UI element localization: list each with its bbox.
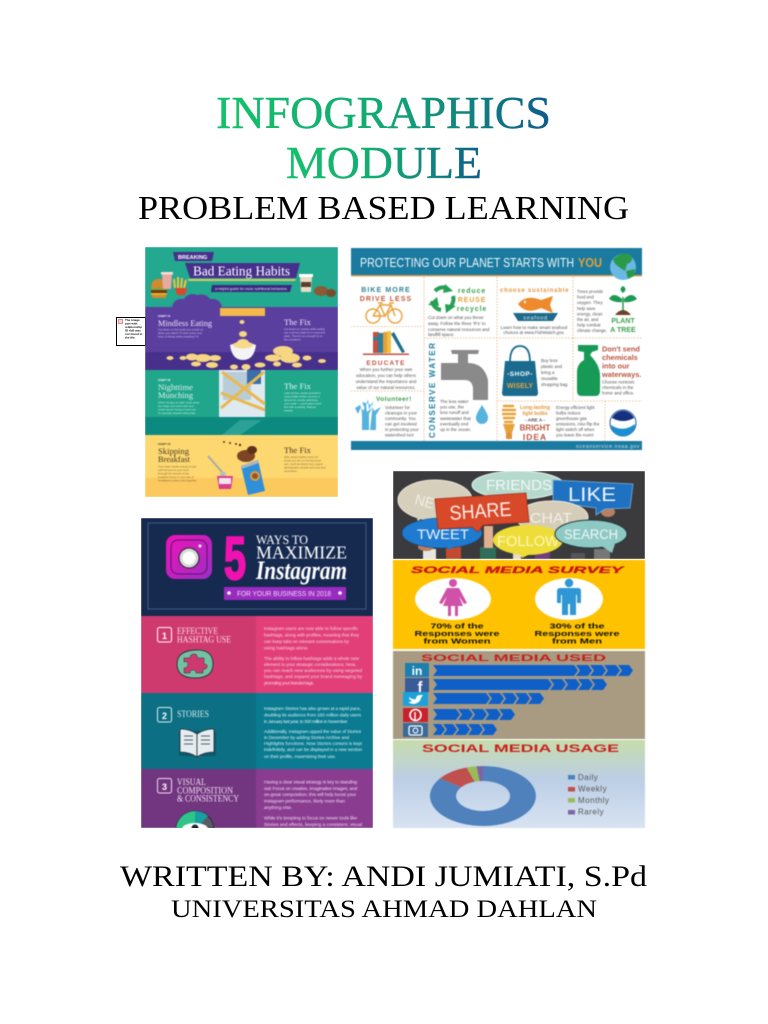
- recycle: REUSE: [458, 297, 486, 304]
- educate: education, you can help others: [356, 373, 417, 378]
- conserve water: [428, 343, 488, 438]
- section: mindless eating: [158, 314, 213, 338]
- no chemicals: Don't send: [602, 344, 640, 354]
- seafood: choose sustainable: [500, 288, 569, 294]
- bar: instagram: [403, 723, 497, 737]
- section: nighttime munching: [158, 378, 200, 415]
- bubble: share: [435, 493, 529, 532]
- fix text: your meal — you'll pass it and: [284, 402, 322, 406]
- section 2: stories: Highlights functions. Now Stories content is kept: [264, 741, 363, 746]
- broken image placeholder: The image: [125, 318, 140, 322]
- bright idea: BRIGHT: [520, 424, 550, 432]
- educate: EDUCATE: [366, 360, 406, 367]
- fix text: plate. There's not enough fit on: [284, 334, 323, 338]
- seafood: seafood: [523, 316, 548, 322]
- volunteer: Volunteer for: [385, 405, 410, 410]
- fix text: decent for mostly satisfying: [284, 398, 318, 402]
- fix text: The Fix: [284, 445, 312, 455]
- header bar: PROTECTING OUR PLANET STARTS WITH: [360, 256, 574, 270]
- plant a tree: oxygen. They: [577, 300, 604, 305]
- university line: UNIVERSITAS AHMAD DAHLAN: [171, 896, 597, 923]
- plant a tree: help combat: [577, 323, 601, 328]
- fix text: can, such as whole fruit, yogurt,: [284, 462, 324, 466]
- shop wisely: -SHOP-: [507, 371, 533, 378]
- fix text: The Fix: [284, 317, 312, 327]
- section: skipping breakfast: Breakfast: [158, 454, 191, 464]
- recycle: away. Follow the three 'R's' to: [428, 321, 486, 326]
- section: mindless eating: Cut down on the foods you snack on: [158, 328, 204, 332]
- bike more: [360, 287, 412, 323]
- fix text: Cut down on snacks while eating: [284, 327, 325, 331]
- section: nighttime munching: be typically caused eating late.: [158, 411, 196, 415]
- section 2: stories: STORIES: [177, 710, 209, 720]
- fix text: meal a little further up from a: [284, 394, 320, 398]
- panel: social media photo: [393, 471, 645, 559]
- dashed dividers: [351, 277, 642, 441]
- icon: noaa logo: [610, 410, 636, 437]
- icon: bowl and chips: [166, 320, 326, 370]
- shop wisely: [502, 346, 569, 396]
- no chemicals: into our: [602, 362, 630, 370]
- section: skipping breakfast: Your brain needs energy to get: [158, 464, 196, 468]
- shop wisely: WISELY: [507, 383, 533, 390]
- section 2: stories: [141, 693, 373, 769]
- bubble: news: NEWS: [413, 491, 458, 518]
- legend: Daily: [578, 773, 598, 782]
- survey heading: SOCIAL MEDIA SURVEY: [411, 565, 625, 575]
- bubble: follow: FOLLOW: [497, 533, 560, 550]
- raised hands: [418, 507, 615, 559]
- section 3: visual composition: [141, 768, 373, 828]
- recycle: landfill space.: [428, 332, 455, 337]
- section 3: visual composition: Stories and effects, keeping a consistent, visual: [264, 822, 362, 827]
- plant a tree: PLANT: [611, 318, 635, 325]
- men response text: from Men: [552, 636, 603, 646]
- bar: facebook: f: [418, 679, 424, 696]
- no chemicals: home and office.: [602, 390, 634, 396]
- conserve water: The less water: [440, 399, 469, 404]
- heading ribbon: Bad Eating Habits: [193, 264, 290, 280]
- women response text: from Women: [424, 636, 491, 646]
- volunteer: Volunteer!: [376, 396, 412, 403]
- section 1: hashtag: hashtags, and expand your brand messaging by: [264, 674, 363, 679]
- shop wisely: bring a: [541, 370, 555, 375]
- plant a tree: [577, 286, 637, 334]
- broken image placeholder: not found in: [125, 332, 142, 336]
- section: nighttime munching: When hungry at night, keep away: [158, 400, 200, 404]
- bike more: DRIVE LESS: [360, 296, 412, 303]
- section 2: stories: Additionally, Instagram upped the value of Stories: [264, 729, 362, 734]
- section 3: visual composition: 3: [162, 782, 167, 792]
- footer bar: oceanservice.noaa.gov: [576, 444, 640, 450]
- section 2: stories: indefinitely, and can be displayed in a new section: [264, 747, 362, 752]
- panel: bad eating habits: [145, 247, 338, 497]
- fix text: the container!: [284, 338, 301, 342]
- breaking ribbon: [173, 252, 214, 261]
- section 2: stories: in January last year, to 300 million in November.: [264, 719, 348, 724]
- used heading: SOCIAL MEDIA USED: [421, 653, 606, 664]
- legend: Rarely: [578, 808, 604, 816]
- header: MAXIMIZE: [256, 542, 347, 562]
- legend: Weekly: [578, 784, 607, 794]
- header: Instagram: [255, 556, 347, 585]
- section: skipping breakfast: Skipping: [158, 446, 190, 456]
- section 1: hashtag: Instagram users are now able to follow specific: [264, 626, 359, 631]
- plant a tree: energy, clean: [577, 311, 603, 316]
- women response text: 70% of the: [430, 622, 484, 630]
- section 1: hashtag: you can reach new audiences by using targeted: [264, 668, 362, 673]
- volunteer: cleanups in your: [385, 410, 418, 416]
- section: nighttime munching: snack doors! Going to bed can: [158, 408, 196, 412]
- usage heading: SOCIAL MEDIA USAGE: [422, 743, 619, 755]
- bubble: search: [555, 520, 627, 553]
- panel: social media used: [393, 651, 645, 739]
- no chemicals: waterways.: [601, 370, 641, 379]
- recycle: Cut down on what you throw: [428, 315, 484, 320]
- section 3: visual composition: on-great composition; this will help boost your: [264, 792, 356, 797]
- plant a tree: Trees provide: [577, 289, 604, 294]
- panel: social media usage: [393, 740, 645, 828]
- title: [216, 87, 551, 188]
- bubble: like: [553, 480, 633, 515]
- icon: puzzle: [177, 650, 213, 678]
- fix text: The Fix: [284, 381, 312, 391]
- bubble: tweet: [402, 518, 482, 550]
- section: mindless eating: HABIT #1: [158, 314, 171, 318]
- conserve water: less runoff and: [440, 410, 469, 415]
- broken image placeholder: relationship: [125, 325, 142, 329]
- section 3: visual composition: Instagram performance, likely more than: [264, 798, 345, 804]
- section: mindless eating: Mindless Eating: [158, 318, 213, 328]
- section 3: visual composition: VISUAL: [177, 778, 206, 788]
- header: WAYS TO: [256, 533, 308, 547]
- shop wisely: plastic and: [541, 364, 563, 369]
- fix text: [284, 317, 325, 342]
- section 2: stories: Instagram Stories has also grown at a rapid pace,: [264, 706, 361, 711]
- fix text: wholegrains cereals and nuts and: [284, 466, 326, 470]
- bubble: friends: [472, 471, 564, 499]
- section: mindless eating: busy of things while snacking TV.: [158, 334, 199, 338]
- men response text: 30% of the: [550, 622, 604, 630]
- header: [141, 518, 373, 616]
- header: FOR YOUR BUSINESS IN 2018: [237, 589, 331, 598]
- section 3: visual composition: While it's tempting to focus on newer tools like: [264, 816, 357, 820]
- section 1: hashtag: [141, 616, 373, 693]
- no chemicals: Choose nontoxic: [602, 380, 636, 384]
- yellow tab: [220, 308, 265, 316]
- icon: globe: [610, 254, 636, 280]
- men response text: [534, 622, 620, 646]
- section 1: hashtag: can keep tabs on relevant conversations by: [264, 639, 350, 644]
- conserve water: CONSERVE WATER: [428, 343, 437, 438]
- section 1: hashtag: The ability to follow hashtags adds a whole new: [264, 656, 360, 661]
- section 1: hashtag: element to your strategic considerations. Now,: [264, 662, 356, 667]
- bike more: BIKE MORE: [361, 287, 411, 294]
- header bar: YOU: [578, 256, 602, 270]
- icon: book: [179, 729, 216, 757]
- broken image placeholder: part with: [125, 322, 138, 326]
- bubble: chat: [518, 500, 590, 532]
- bubble: like: LIKE: [568, 485, 616, 506]
- bar: linkedin: [405, 663, 633, 678]
- title: MODULE: [286, 137, 482, 188]
- bubble: news: [398, 480, 472, 522]
- section 1: hashtag: EFFECTIVE: [177, 627, 218, 637]
- bubble: follow: [493, 525, 563, 558]
- icon: eye: [175, 810, 215, 828]
- cloud shape: [172, 294, 222, 307]
- conserve water: up in the ocean.: [440, 427, 471, 432]
- bubble: chat: CHAT: [530, 510, 572, 527]
- footer bar: [351, 441, 642, 450]
- women response text: Responses were: [414, 629, 500, 638]
- section 2: stories: 2: [162, 711, 167, 721]
- bright idea: light switch off when: [556, 427, 595, 432]
- heading ribbon: [185, 263, 300, 292]
- section 2: stories: in December by adding Stories Archive and: [264, 735, 349, 740]
- conserve water: wastewater that: [440, 416, 472, 421]
- section 3: visual composition: Having a clear visual strategy is key to standing: [264, 780, 357, 784]
- bar: twitter: [403, 692, 544, 706]
- section: skipping breakfast: breakfast is often a bit together.: [158, 478, 197, 482]
- broken image placeholder: ID rId5 was: [125, 328, 141, 332]
- icon: taped window: [219, 370, 265, 435]
- bar: linkedin: in: [412, 664, 422, 678]
- bubble: tweet: TWEET: [417, 526, 469, 542]
- volunteer: community. You: [385, 416, 416, 421]
- section: nighttime munching: Munching: [158, 390, 194, 400]
- fix text: use a dinner plate for a meal and: [284, 330, 325, 334]
- section 3: visual composition: anything else.: [264, 805, 292, 810]
- educate: value of our natural resources.: [356, 385, 416, 390]
- bright idea: IDEA: [523, 432, 547, 442]
- men figure: [535, 578, 603, 620]
- bubble: search: SEARCH: [564, 527, 618, 542]
- fix text: foods you are on the kind and: [284, 458, 321, 462]
- broken image placeholder: the file.: [125, 336, 136, 340]
- icon: burger and drinks: [151, 272, 336, 298]
- shop wisely: reusable: [541, 376, 558, 381]
- plant a tree: A TREE: [610, 327, 636, 334]
- bright idea: light bulbs: [522, 411, 548, 417]
- educate: When you further your own: [360, 367, 413, 372]
- plant a tree: the air, and: [577, 317, 599, 322]
- volunteer: can get involved: [385, 422, 417, 426]
- volunteer: in protecting your: [385, 427, 419, 432]
- recycle: reduce: [458, 288, 486, 295]
- author line: WRITTEN BY: ANDI JUMIATI, S.Pd: [120, 860, 647, 893]
- section 3: visual composition: out! Focus on creative, imaginative images, and: [264, 786, 357, 791]
- legend: Monthly: [578, 796, 610, 805]
- panel: instagram: [141, 518, 373, 849]
- bright idea: Long-lasting: [520, 405, 550, 411]
- bright idea: bulbs reduce: [556, 410, 581, 416]
- section: nighttime munching: HABIT #2: [158, 378, 171, 382]
- men response text: Responses were: [534, 629, 620, 638]
- section 1: hashtag: 1: [162, 631, 167, 641]
- section 1: hashtag: promoting your branded tags.: [264, 680, 314, 686]
- bright idea: emissions. Also flip the: [556, 422, 600, 426]
- bar: facebook: [405, 678, 607, 696]
- heading ribbon: a helpful guide for more nutritional behaviors: [215, 287, 287, 291]
- legend: [568, 773, 610, 816]
- no chemicals: [577, 344, 641, 396]
- section: mindless eating: when you watch TV and notice how: [158, 331, 203, 335]
- section: nighttime munching: the fridge and other late-hour: [158, 404, 194, 408]
- plant a tree: climate change.: [577, 328, 607, 333]
- fix text: [284, 445, 326, 473]
- panel: social media survey: [393, 560, 645, 649]
- recycle: [428, 284, 490, 337]
- educate: [356, 331, 417, 390]
- fix text: Skip using healthy items for: [284, 455, 318, 459]
- plant a tree: help save: [577, 306, 596, 311]
- bright idea: - ARE A -: [525, 418, 546, 424]
- section 1: hashtag: HASHTAG USE: [177, 636, 231, 646]
- section: skipping breakfast: well fed just as your food: [158, 468, 189, 472]
- women figure: [415, 578, 491, 620]
- recycle: conserve natural resources and: [428, 327, 490, 332]
- bubble: share: SHARE: [449, 499, 512, 525]
- bar: pinterest: [403, 708, 515, 722]
- subtitle: PROBLEM BASED LEARNING: [138, 190, 629, 227]
- header: 5: [224, 525, 246, 592]
- no chemicals: chemicals: [602, 353, 638, 362]
- educate: understand the importance and: [356, 379, 417, 384]
- fix text: Later dinner, snack yourself a: [284, 391, 321, 395]
- bright idea: you leave the room!: [556, 432, 594, 438]
- recycle: recycle: [457, 306, 487, 313]
- title: INFOGRAPHICS: [216, 87, 551, 138]
- section 3: visual composition: & CONSISTENCY: [177, 794, 239, 804]
- section 2: stories: doubling its audience from 150 million daily users: [264, 712, 362, 718]
- icon: yogurt and cereal: [208, 441, 265, 495]
- bubble: friends: FRIENDS: [486, 477, 552, 494]
- section 2: stories: on their profile, maximizing their use.: [264, 754, 336, 759]
- seafood: choices at www.FishWatch.gov.: [503, 330, 565, 335]
- fix text: smoothies.: [284, 469, 298, 473]
- icon: camera: [166, 535, 212, 579]
- shop wisely: Buy less: [541, 358, 558, 363]
- no chemicals: chemicals in the: [602, 385, 634, 390]
- fix text: line with a variety. Natural: [284, 405, 316, 409]
- header bar: [351, 248, 642, 276]
- breaking ribbon: BREAKING: [178, 255, 207, 261]
- seafood: Learn how to make smart seafood: [501, 325, 568, 330]
- seafood: [500, 288, 569, 335]
- section: skipping breakfast: [158, 442, 197, 482]
- bright idea: [502, 405, 600, 442]
- panel: protecting our planet: [351, 248, 642, 450]
- conserve water: you use, the: [440, 405, 464, 410]
- section 3: visual composition: COMPOSITION: [177, 786, 233, 796]
- donut chart: [430, 766, 536, 826]
- women response text: [414, 622, 500, 646]
- volunteer: watershed too!: [385, 432, 414, 438]
- shop wisely: shopping bag.: [541, 382, 569, 387]
- fix text: [284, 381, 322, 412]
- bright idea: Energy efficient light: [556, 405, 595, 410]
- section 1: hashtag: using hashtags alone.: [264, 646, 309, 650]
- volunteer: [355, 396, 419, 438]
- conserve water: eventually end: [440, 421, 469, 426]
- broken image placeholder: [116, 318, 146, 346]
- section: skipping breakfast: through the stretch of the: [158, 472, 190, 476]
- section: skipping breakfast: toughest times in your day of: [158, 475, 194, 479]
- section: skipping breakfast: HABIT #3: [158, 442, 171, 446]
- plant a tree: food and: [577, 295, 594, 300]
- bright idea: greenhouse gas: [556, 416, 587, 421]
- section 1: hashtag: hashtags, along with profiles, meaning that they: [264, 632, 360, 638]
- fix text: snacks.: [284, 408, 294, 412]
- section: nighttime munching: Nighttime: [158, 382, 193, 392]
